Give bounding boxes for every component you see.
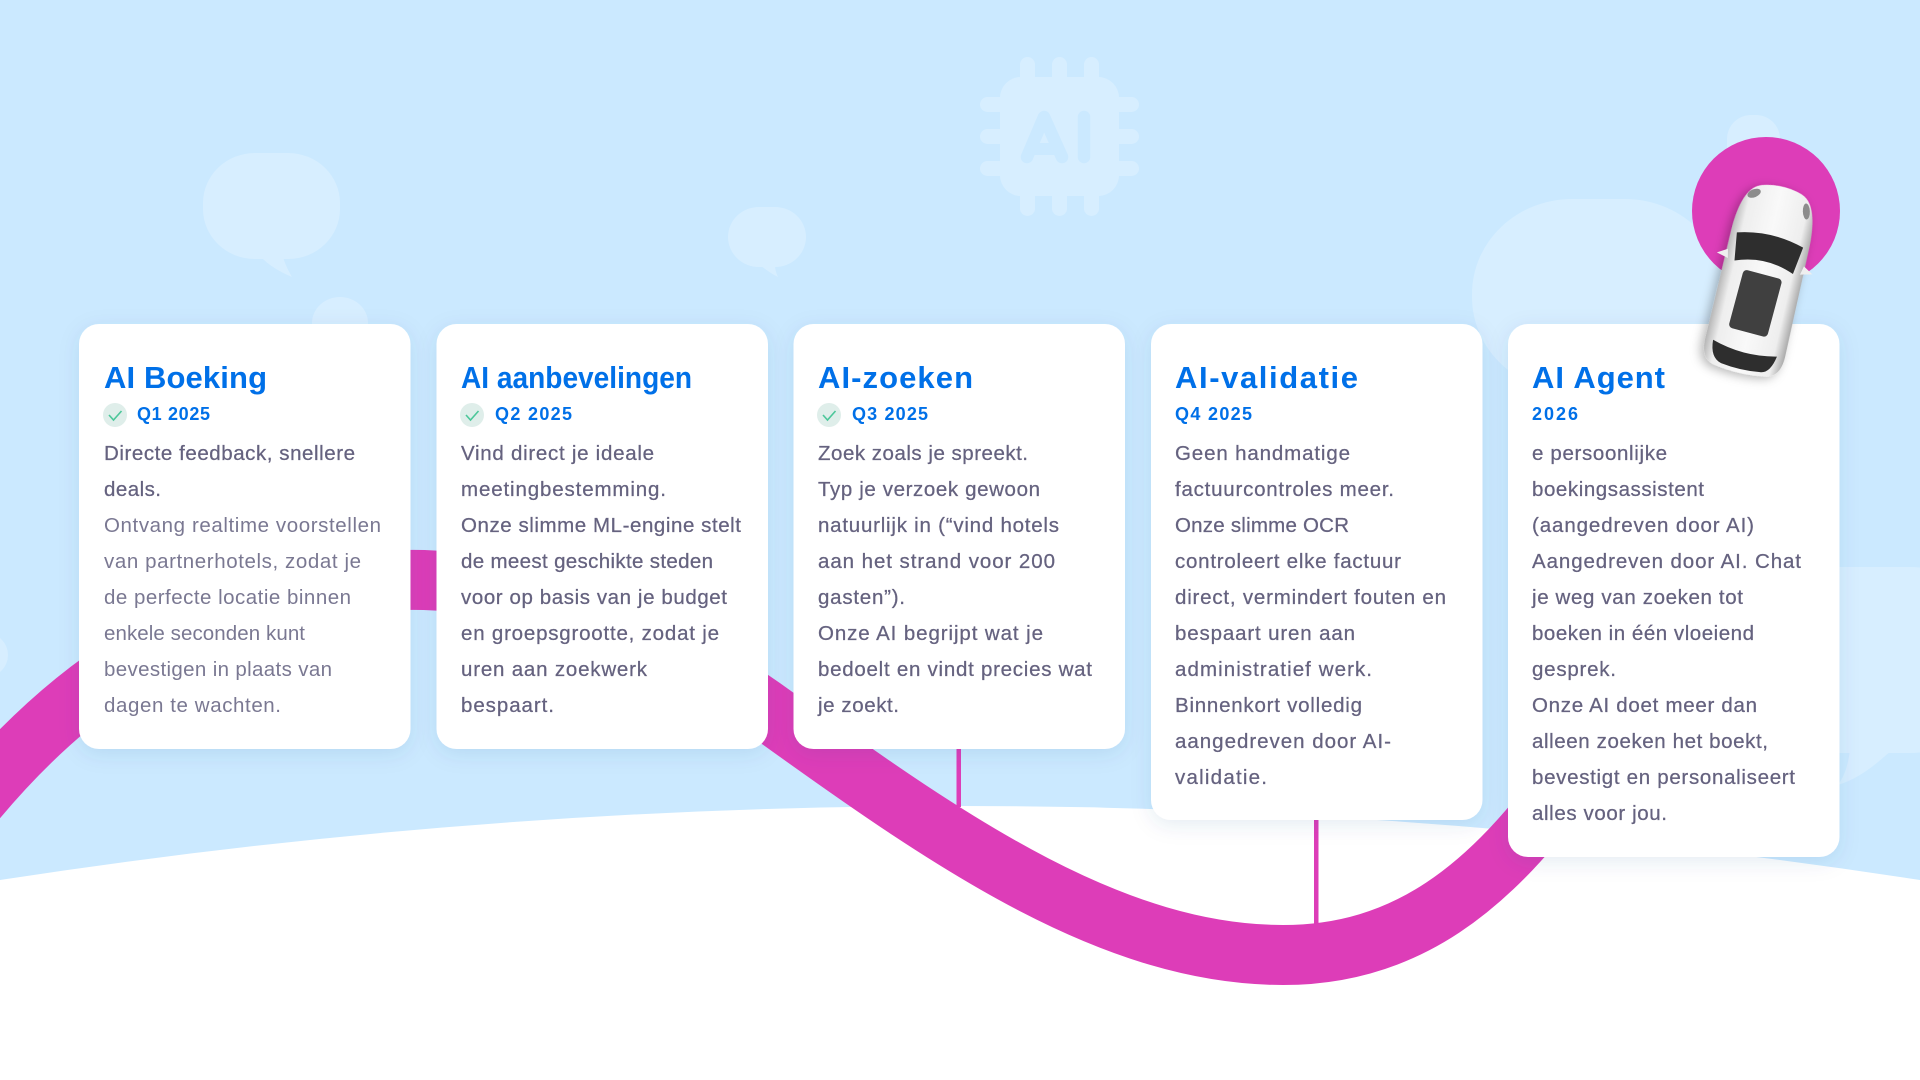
description: gasten”).	[818, 586, 905, 609]
icon: speech bubble lower right	[1700, 567, 1920, 785]
icon: speech bubble large right	[1472, 199, 1725, 392]
description: Onze AI begrijpt wat je	[818, 622, 1043, 645]
description: e persoonlijke	[1532, 442, 1667, 465]
icon: speech bubble large left	[203, 153, 340, 277]
connector line card 4	[1314, 815, 1318, 930]
title: AI-validatie	[1175, 360, 1358, 395]
description: en groepsgrootte, zodat je	[461, 622, 719, 645]
date: Q2 2025	[495, 404, 572, 424]
description: Directe feedback, snellere	[104, 442, 355, 465]
description: validatie.	[1175, 766, 1267, 789]
magenta road ribbon	[0, 580, 1575, 955]
description	[461, 442, 741, 717]
description: Ontvang realtime voorstellen	[104, 514, 381, 537]
description: aan het strand voor 200	[818, 550, 1055, 573]
description: Typ je verzoek gewoon	[818, 478, 1040, 501]
end point circle	[1692, 137, 1840, 285]
description: factuurcontroles meer.	[1175, 478, 1394, 501]
description: alleen zoeken het boekt,	[1532, 730, 1768, 753]
description: boeken in één vloeiend	[1532, 622, 1754, 645]
title: AI Agent	[1532, 360, 1665, 395]
description: Zoek zoals je spreekt.	[818, 442, 1028, 465]
description: direct, vermindert fouten en	[1175, 586, 1446, 609]
description: de perfecte locatie binnen	[104, 586, 351, 609]
white hill	[0, 806, 1920, 1080]
description: Aangedreven door AI. Chat	[1532, 550, 1801, 573]
description: je weg van zoeken tot	[1531, 586, 1743, 609]
description: administratief werk.	[1175, 658, 1372, 681]
description: natuurlijk in (“vind hotels	[818, 514, 1059, 537]
description: Binnenkort volledig	[1175, 694, 1362, 717]
card: AI-zoeken	[794, 324, 1125, 749]
description: van partnerhotels, zodat je	[104, 550, 361, 573]
icon: speech bubble medium	[728, 207, 806, 277]
icon: check	[460, 403, 484, 427]
date: Q4 2025	[1175, 404, 1252, 424]
icon: AI chip	[980, 57, 1139, 216]
description: bedoelt en vindt precies wat	[818, 658, 1092, 681]
connector line card 3	[956, 745, 961, 807]
date: Q3 2025	[852, 404, 928, 424]
title: AI Boeking	[104, 360, 267, 395]
card: AI Boeking	[79, 324, 410, 749]
icon: check	[103, 403, 127, 427]
description: (aangedreven door AI)	[1532, 514, 1754, 537]
description: dagen te wachten.	[104, 694, 281, 717]
icon: speech bubble far left edge	[0, 633, 8, 677]
description: meetingbestemming.	[461, 478, 666, 501]
card: AI Agent	[1508, 324, 1840, 857]
description: Vind direct je ideale	[461, 442, 654, 465]
description: voor op basis van je budget	[461, 586, 727, 609]
title: AI-zoeken	[818, 360, 973, 395]
description: boekingsassistent	[1532, 478, 1704, 501]
icon: speech bubble top right	[1727, 115, 1780, 175]
icon: white car top view	[1692, 176, 1830, 384]
description: aangedreven door AI-	[1175, 730, 1391, 753]
description: alles voor jou.	[1532, 802, 1667, 825]
description: je zoekt.	[817, 694, 899, 717]
icon: speech bubble small behind card	[312, 297, 368, 357]
description	[1531, 442, 1801, 825]
description	[104, 442, 381, 717]
description: bevestigt en personaliseert	[1532, 766, 1795, 789]
icon: check	[817, 403, 841, 427]
description: Geen handmatige	[1175, 442, 1350, 465]
description: de meest geschikte steden	[461, 550, 713, 573]
description: controleert elke factuur	[1175, 550, 1401, 573]
description: bespaart uren aan	[1175, 622, 1355, 645]
date: Q1 2025	[137, 404, 210, 424]
card: AI aanbevelingen	[436, 324, 768, 749]
description: gesprek.	[1532, 658, 1616, 681]
description: Onze slimme ML-engine stelt	[461, 514, 741, 537]
description: deals.	[104, 478, 161, 501]
description	[1175, 442, 1446, 789]
description: bevestigen in plaats van	[104, 658, 332, 681]
card: AI-validatie	[1151, 324, 1482, 820]
description	[817, 442, 1092, 717]
description: uren aan zoekwerk	[461, 658, 648, 681]
description: bespaart.	[461, 694, 554, 717]
description: Onze slimme OCR	[1175, 514, 1349, 537]
date: 2026	[1532, 404, 1578, 424]
title: AI aanbevelingen	[461, 360, 692, 395]
description: enkele seconden kunt	[104, 622, 305, 645]
description: Onze AI doet meer dan	[1532, 694, 1757, 717]
